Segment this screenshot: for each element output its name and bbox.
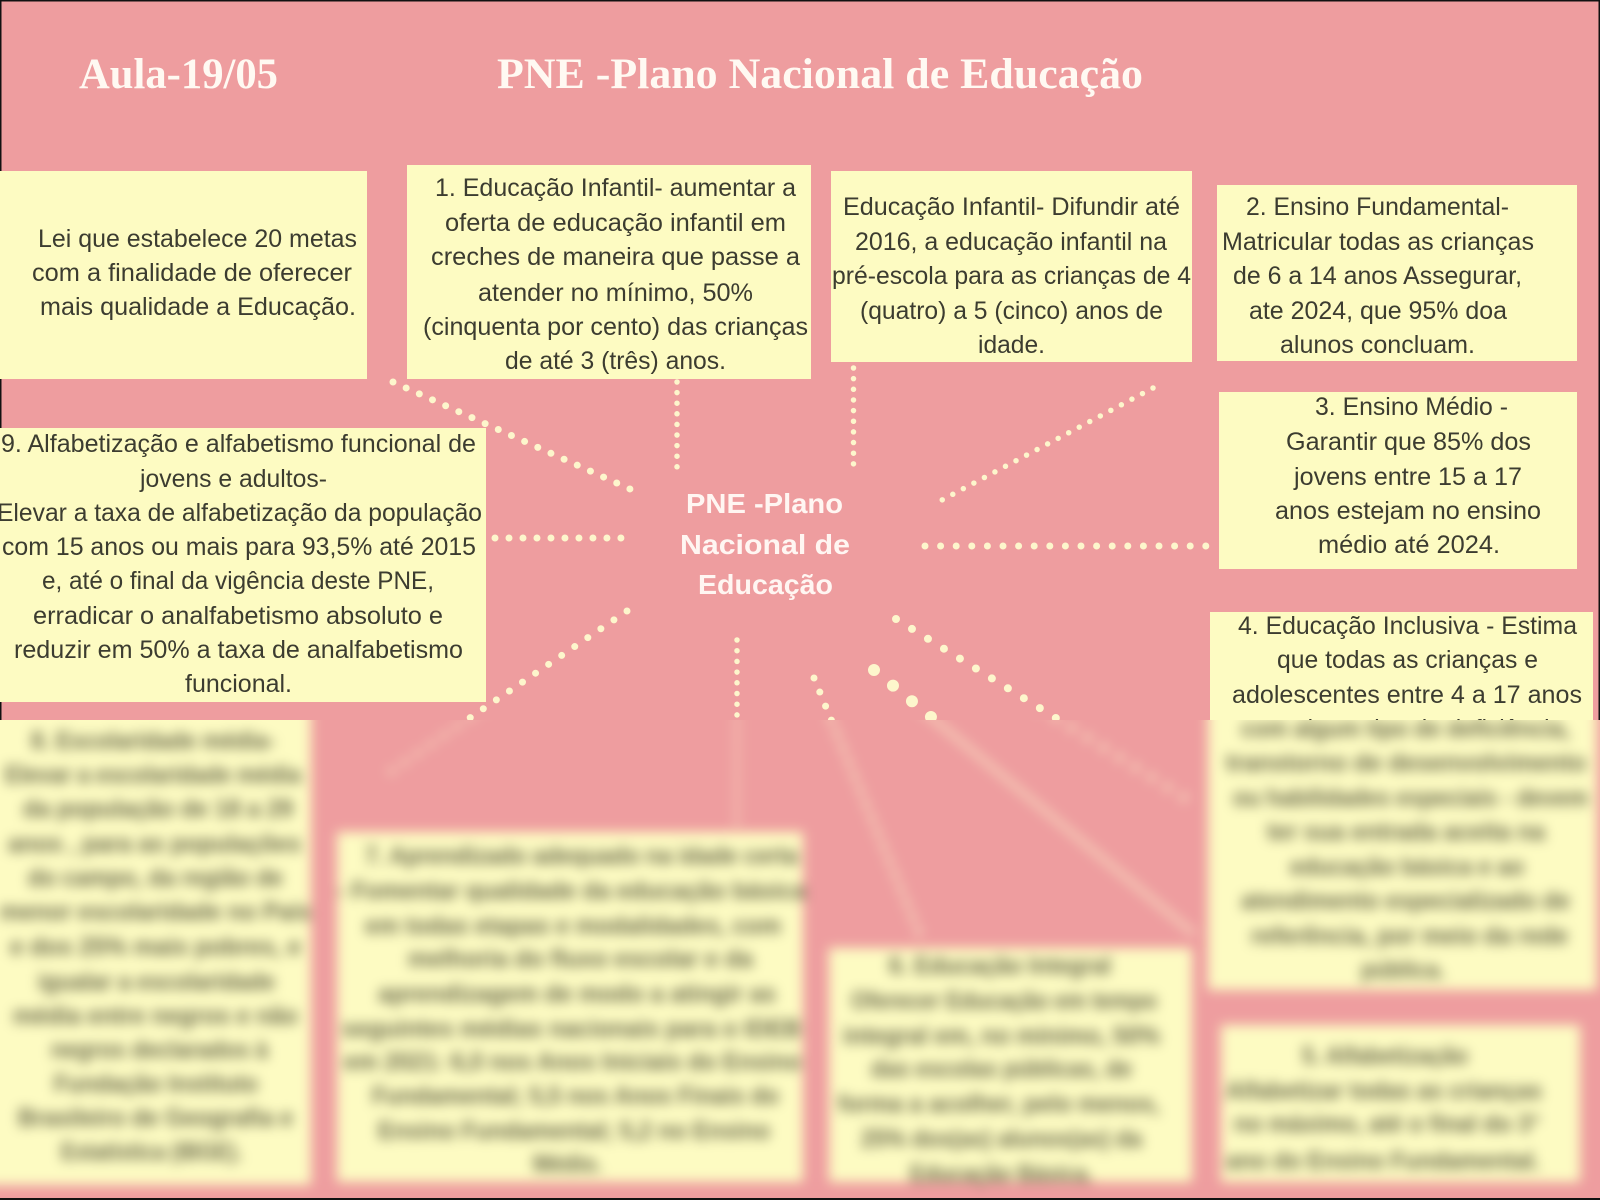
panel: meta 3 ensino médio: 3. Ensino Médio - — [1315, 393, 1508, 421]
panel: meta 3 ensino médio: Garantir que 85% dos — [1286, 428, 1531, 456]
panel: meta 8 escolaridade média: Estatística (IBGE). — [61, 1138, 242, 1166]
panel: meta 1 educação infantil: oferta de educação infantil em — [445, 209, 786, 237]
panel: meta 6 educação integral: 25% dos(as) alunos(as) da — [861, 1125, 1143, 1153]
panel: meta 2 ensino fundamental: Matricular todas as crianças — [1222, 228, 1534, 256]
panel: meta 5 alfabetização — [1221, 1025, 1580, 1182]
panel: meta 1 educação infantil: creches de maneira que passe a — [431, 243, 800, 271]
panel: meta 4 educação inclusiva (lower part): educação básica e ao — [1290, 853, 1524, 881]
panel: meta 3 ensino médio: anos estejam no ensino — [1275, 497, 1541, 525]
blurred dotted connectors — [388, 720, 1197, 938]
panel: meta 7 aprendizado adequado: em todas etapas e modalidades, com — [365, 912, 781, 940]
panel: meta 3 ensino médio: jovens entre 15 a 17 — [1293, 463, 1522, 491]
panel: meta 6 educação integral: 6. Educação Integral — [889, 952, 1111, 980]
panel: meta 2 ensino fundamental: ate 2024, que 95% doa — [1249, 297, 1507, 325]
panel: meta 1 educação infantil: 1. Educação Infantil- aumentar a — [435, 174, 796, 202]
panel: lei intro: mais qualidade a Educação. — [40, 293, 356, 321]
panel: meta 8 escolaridade média: anos , para as populações — [8, 830, 301, 858]
panel: meta 8 escolaridade média: e dos 25% mais pobres, e — [10, 933, 301, 961]
panel: meta 2 ensino fundamental: alunos concluam. — [1280, 331, 1475, 359]
panel: meta 5 alfabetização: Alfabetizar todas as crianças — [1226, 1077, 1542, 1105]
title: PNE - Plano Nacional de Educação: PNE -Plano Nacional de Educação — [497, 51, 1143, 98]
panel: meta 2 ensino fundamental — [1217, 185, 1577, 361]
panel: meta 8 escolaridade média: 8. Escolaridade média- — [31, 727, 275, 755]
panel: meta 7 aprendizado adequado: melhoria do fluxo escolar e da — [408, 945, 754, 973]
panel: meta 4 educação inclusiva (lower part): referência, por meio da rede — [1251, 922, 1568, 950]
panel: meta 6 educação integral: Oferecer Educação em tempo — [851, 987, 1157, 1015]
panel: meta 1 educação infantil — [407, 165, 811, 379]
panel: meta 1 educação infantil: de até 3 (três) anos. — [505, 347, 726, 375]
central topic: PNE - Plano Nacional de Educação: Educação — [698, 569, 833, 600]
panel: meta 8 escolaridade média: do campo, da região de — [28, 864, 283, 892]
central topic: PNE - Plano Nacional de Educação — [680, 488, 850, 600]
panel: meta 6 educação integral: das escolas públicas, de — [871, 1055, 1132, 1083]
panel: educação infantil pré-escola: 2016, a educação infantil na — [855, 228, 1167, 256]
panel: meta 5 alfabetização: ano do Ensino Fundamental. — [1226, 1147, 1540, 1175]
panel: lei intro: com a finalidade de oferecer — [32, 259, 352, 287]
panel: meta 2 ensino fundamental: 2. Ensino Fundamental- — [1246, 193, 1509, 221]
panel: meta 6 educação integral: Educação Básica. — [910, 1160, 1093, 1188]
panel: meta 7 aprendizado adequado: 7. Aprendizado adequado na idade certa — [365, 842, 799, 870]
dotted connectors radiating from the centre — [390, 365, 1210, 720]
panel: meta 4 educação inclusiva (lower part) — [1208, 690, 1597, 990]
panel: meta 8 escolaridade média: média entre negros e não — [13, 1002, 298, 1030]
panel: meta 4 educação inclusiva (lower part): atendimento especializado de — [1241, 887, 1570, 915]
panel: meta 8 escolaridade média: Fundação Instituto — [54, 1070, 258, 1098]
panel: meta 4 educação inclusiva (lower part): ter sua entrada aceita na — [1267, 818, 1546, 846]
panel: meta 7 aprendizado adequado: Fundamental; 5,5 nos Anos Finais do — [372, 1082, 779, 1110]
central topic: PNE - Plano Nacional de Educação: PNE -Plano — [686, 488, 843, 519]
title: Aula-19/05: Aula-19/05 — [79, 51, 278, 98]
panel: meta 8 escolaridade média: da população de 18 a 29 — [23, 795, 293, 823]
panel: meta 4 educação inclusiva (upper part): 4. Educação Inclusiva - Estima — [1238, 612, 1577, 640]
panel: meta 6 educação integral: integral em, no mínimo, 50% — [843, 1022, 1160, 1050]
panel: meta 7 aprendizado adequado — [337, 832, 807, 1182]
panel: meta 8 escolaridade média — [0, 700, 311, 1185]
panel: meta 8 escolaridade média: Brasileiro de Geografia e — [18, 1104, 293, 1132]
panel: meta 1 educação infantil: atender no mínimo, 50% — [478, 279, 753, 307]
panel: meta 9 alfabetização de jovens e adultos: 9. Alfabetização e alfabetismo funcional de — [1, 430, 476, 458]
panel: meta 9 alfabetização de jovens e adultos: com 15 anos ou mais para 93,5% até 2015 — [2, 533, 476, 561]
panel: meta 4 educação inclusiva (upper part) — [1210, 612, 1593, 720]
panel: lei intro — [0, 171, 367, 379]
panel: meta 4 educação inclusiva (upper part): adolescentes entre 4 a 17 anos — [1232, 681, 1582, 709]
panel: meta 8 escolaridade média: Elevar a escolaridade média — [5, 761, 302, 789]
panel: meta 6 educação integral — [829, 948, 1192, 1188]
panel: meta 9 alfabetização de jovens e adultos: Elevar a taxa de alfabetização da população — [0, 499, 482, 527]
panel: meta 7 aprendizado adequado: em 2021: 6,0 nos Anos Iniciais do Ensino — [344, 1048, 801, 1076]
panel: meta 4 educação inclusiva (lower part): com algum tipo de deficiência, — [1241, 715, 1570, 743]
panel: meta 9 alfabetização de jovens e adultos: erradicar o analfabetismo absoluto e — [33, 602, 443, 630]
panel: meta 9 alfabetização de jovens e adultos: e, até o final da vigência deste PNE, — [42, 567, 434, 595]
central topic: PNE - Plano Nacional de Educação: Nacional de — [680, 529, 850, 560]
blurred lower section — [0, 720, 1600, 1198]
panel: meta 8 escolaridade média: igualar a escolaridade — [38, 968, 275, 996]
panel: meta 7 aprendizado adequado: Médio. — [533, 1150, 602, 1178]
panel: meta 4 educação inclusiva (upper part): que todas as crianças e — [1277, 646, 1538, 674]
panel: meta 7 aprendizado adequado: Ensino Fundamental; 5,2 no Ensino — [378, 1117, 770, 1145]
panel: educação infantil pré-escola: pré-escola para as crianças de 4 — [832, 262, 1191, 290]
panel: meta 4 educação inclusiva (lower part): pública. — [1361, 956, 1445, 984]
panel: educação infantil pré-escola: (quatro) a 5 (cinco) anos de — [860, 297, 1163, 325]
panel: educação infantil pré-escola — [831, 171, 1192, 362]
panel: meta 8 escolaridade média: menor escolaridade no País — [0, 898, 311, 926]
panel: meta 6 educação integral: forma a acolher, pelo menos, — [838, 1090, 1160, 1118]
panel: lei intro: Lei que estabelece 20 metas — [38, 225, 357, 253]
panel: meta 8 escolaridade média: negros declarados à — [51, 1036, 268, 1064]
panel: meta 5 alfabetização: no máximo, até o final do 3° — [1234, 1110, 1540, 1138]
panel: meta 9 alfabetização de jovens e adultos — [0, 428, 486, 702]
panel: meta 9 alfabetização de jovens e adultos: funcional. — [185, 670, 292, 698]
sharp upper section — [0, 58, 1593, 720]
panel: meta 7 aprendizado adequado: - Fomentar qualidade da educação básica — [337, 877, 807, 905]
panel: meta 7 aprendizado adequado: seguintes médias nacionais para o IDEB — [342, 1015, 801, 1043]
panel: meta 4 educação inclusiva (lower part): transtorno de desenvolvimento — [1226, 749, 1586, 777]
panel: educação infantil pré-escola: idade. — [978, 331, 1045, 359]
panel: meta 4 educação inclusiva (upper part): com algum tipo de deficiência, — [1241, 715, 1570, 743]
panel: meta 2 ensino fundamental: de 6 a 14 anos Assegurar, — [1233, 262, 1522, 290]
panel: meta 9 alfabetização de jovens e adultos: reduzir em 50% a taxa de analfabetismo — [14, 636, 463, 664]
panel: meta 7 aprendizado adequado: aprendizagem de modo a atingir as — [378, 980, 776, 1008]
panel: meta 1 educação infantil: (cinquenta por cento) das crianças — [423, 313, 808, 341]
panel: meta 9 alfabetização de jovens e adultos: jovens e adultos- — [139, 465, 327, 493]
panel: meta 3 ensino médio — [1219, 392, 1577, 569]
panel: educação infantil pré-escola: Educação Infantil- Difundir até — [843, 193, 1180, 221]
panel: meta 3 ensino médio: médio até 2024. — [1318, 531, 1500, 559]
panel: meta 5 alfabetização: 5. Alfabetização — [1302, 1042, 1468, 1070]
